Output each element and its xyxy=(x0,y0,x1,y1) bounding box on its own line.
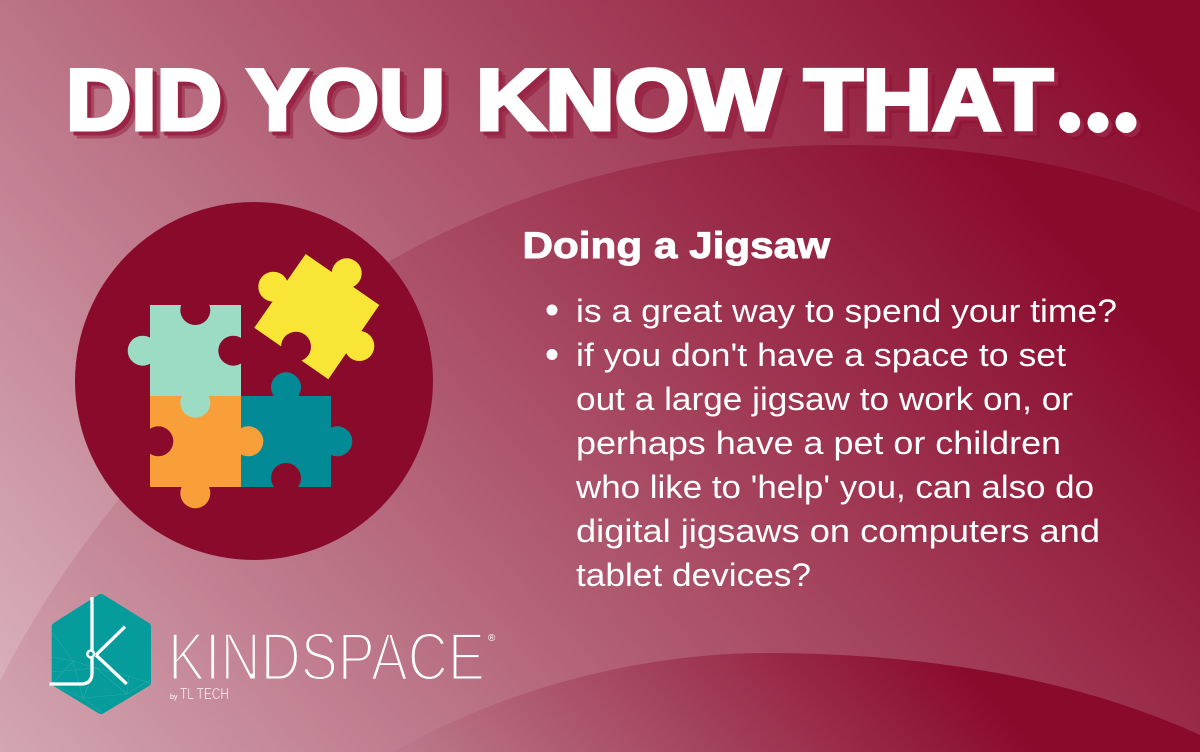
logo wordmark: KINDSPACE xyxy=(168,619,485,695)
title xyxy=(66,53,1136,149)
bullet list xyxy=(546,293,1117,593)
bullet list: is a great way to spend your time? xyxy=(576,293,1117,329)
heading: Doing a Jigsaw xyxy=(522,225,830,266)
bullet list: perhaps have a pet or children xyxy=(576,425,1061,461)
logo byline xyxy=(170,686,229,703)
bullet list: digital jigsaws on computers and xyxy=(576,513,1100,549)
title: THAT xyxy=(804,53,1053,149)
registered mark: ® xyxy=(488,633,496,644)
bullet list: out a large jigsaw to work on, or xyxy=(576,381,1073,417)
title: ... xyxy=(1059,130,1061,132)
bullet list: if you don't have a space to set xyxy=(576,337,1066,373)
background lower curved panel xyxy=(394,653,1200,752)
bullet list: tablet devices? xyxy=(576,557,811,593)
title: YOU xyxy=(247,53,445,149)
teal puzzle piece xyxy=(241,372,352,493)
logo byline: TL TECH xyxy=(180,686,229,703)
logo byline: by xyxy=(170,694,178,701)
mint puzzle piece xyxy=(128,295,248,396)
orange puzzle piece xyxy=(143,388,263,508)
title: KNOW xyxy=(476,53,781,149)
yellow puzzle piece xyxy=(254,254,379,379)
logo hexagon icon xyxy=(50,597,150,712)
bullet list: who like to 'help' you, can also do xyxy=(575,469,1094,505)
logo: Kindspace by TL Tech xyxy=(50,597,496,712)
icon: jigsaw puzzle in circle xyxy=(75,202,433,560)
title: DID xyxy=(66,53,222,149)
